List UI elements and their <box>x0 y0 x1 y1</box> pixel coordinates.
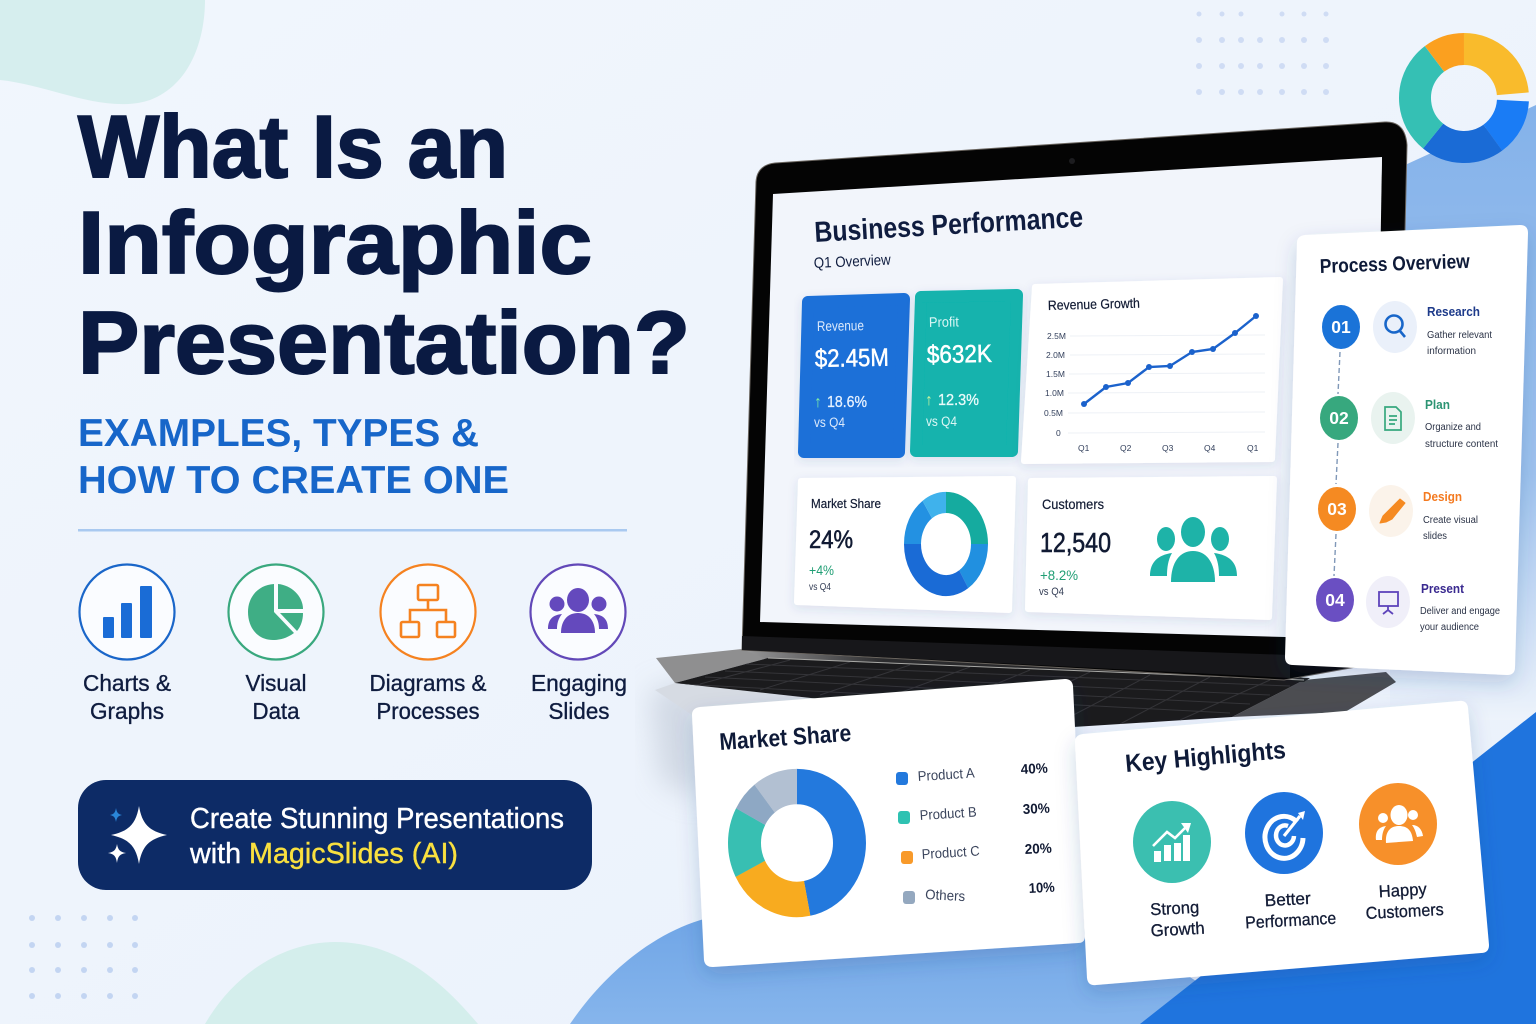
highlight: better performance: Better <box>1264 889 1312 910</box>
icon: people <box>530 564 626 660</box>
step 02 plan: structure content <box>1425 439 1498 450</box>
background shape: right light blue <box>1390 105 1536 720</box>
highlight: strong growth: Strong <box>1150 898 1200 919</box>
label: visual data <box>246 670 306 724</box>
step 04 present: Present <box>1421 581 1465 596</box>
dashboard heading: Business Performance <box>814 202 1084 249</box>
line chart: 1.5M <box>1046 369 1065 379</box>
step 04 present: your audience <box>1420 622 1479 633</box>
decorative donut chart: top right <box>1395 29 1533 167</box>
step 03 design: 03 <box>1327 499 1347 519</box>
revenue card <box>804 299 904 452</box>
icon: bar chart <box>80 564 174 660</box>
step 02 plan: 02 <box>1329 408 1349 428</box>
dashboard heading <box>813 202 1084 272</box>
laptop <box>655 122 1407 790</box>
revenue card: $2.45M <box>815 344 889 373</box>
icon: customers group <box>1150 517 1237 582</box>
title: Presentation? <box>78 293 690 392</box>
legend: 30% <box>1022 800 1051 817</box>
background blob: bottom blue <box>570 914 1260 1024</box>
customers dashboard card: +8.2% <box>1040 567 1078 583</box>
step 02 plan: Plan <box>1425 397 1450 412</box>
revenue growth card <box>1024 280 1280 461</box>
label: charts and graphs: Graphs <box>90 698 164 724</box>
icon: sparkles <box>108 806 167 864</box>
background shape: bottom-right dark blue <box>1140 712 1536 1024</box>
legend: Product B <box>919 804 977 823</box>
panel: process overview <box>1285 225 1528 675</box>
line chart: 1.0M <box>1045 388 1064 398</box>
step 01 research: 01 <box>1331 317 1351 337</box>
step 01 research: Gather relevant <box>1427 330 1492 341</box>
legend: Product A <box>917 765 976 784</box>
revenue growth card: Revenue Growth <box>1048 296 1140 313</box>
background blob: bottom teal <box>205 942 478 1024</box>
feature: charts and graphs <box>80 564 174 724</box>
line chart <box>1044 313 1265 453</box>
label: engaging slides <box>531 670 627 724</box>
profit card: Profit <box>929 313 959 330</box>
feature: diagrams and processes <box>370 564 486 724</box>
label: diagrams and processes: Diagrams & <box>370 670 486 696</box>
feature: engaging slides <box>530 564 627 724</box>
legend: 10% <box>1028 879 1056 896</box>
step 01 research: Research <box>1427 304 1480 319</box>
customers dashboard card: 12,540 <box>1040 527 1111 558</box>
button text <box>189 803 564 870</box>
line chart: Q1 <box>1247 443 1259 453</box>
revenue card: 18.6% <box>827 394 867 411</box>
profit card: ↑ <box>925 392 933 409</box>
step 01 research: information <box>1427 346 1476 357</box>
line chart: 2.0M <box>1046 350 1065 360</box>
label: engaging slides: Engaging <box>531 670 627 696</box>
market share dashboard card: vs Q4 <box>809 582 831 593</box>
step 03 design <box>1318 485 1478 542</box>
step 02 plan <box>1320 392 1498 450</box>
button text: with MagicSlides (AI) <box>189 838 458 870</box>
key highlights heading: Key Highlights <box>1124 736 1287 778</box>
step 03 design: slides <box>1423 531 1447 542</box>
market share heading: Market Share <box>719 720 852 756</box>
line chart: 2.5M <box>1047 331 1066 341</box>
panel: market share <box>692 679 1085 967</box>
icon: pie chart <box>228 564 324 660</box>
line chart: Q1 <box>1078 443 1090 453</box>
legend: Others <box>925 886 966 904</box>
step 03 design: Design <box>1423 489 1462 504</box>
panel: key highlights <box>1075 701 1489 985</box>
connector line <box>1334 352 1340 576</box>
background blob: top-left teal <box>0 0 205 104</box>
customers dashboard card <box>1028 479 1274 617</box>
subtitle: EXAMPLES, TYPES & <box>78 412 479 455</box>
label: diagrams and processes <box>370 670 486 724</box>
revenue card: vs Q4 <box>814 415 845 430</box>
laptop screen <box>760 157 1382 637</box>
label: charts and graphs <box>83 670 171 724</box>
revenue card: ↑ <box>814 394 822 411</box>
donut chart <box>899 486 993 602</box>
legend: 20% <box>1024 840 1053 857</box>
title <box>78 97 690 392</box>
label: diagrams and processes: Processes <box>376 698 480 724</box>
button text: Create Stunning Presentations <box>190 803 564 835</box>
step 02 plan: Organize and <box>1425 422 1481 433</box>
donut chart <box>723 764 871 922</box>
dot grid: bottom left <box>29 915 138 999</box>
soft shadow under laptop <box>650 680 700 800</box>
line chart: Q4 <box>1204 443 1216 453</box>
highlight: strong growth: Growth <box>1150 919 1205 940</box>
highlight: happy customers <box>1359 783 1444 923</box>
label: visual data: Data <box>252 698 300 724</box>
dashboard heading: Q1 Overview <box>813 252 891 272</box>
label: engaging slides: Slides <box>548 698 610 724</box>
subtitle: HOW TO CREATE ONE <box>78 459 509 502</box>
line chart: Q2 <box>1120 443 1132 453</box>
legend <box>896 760 1056 904</box>
profit card: $632K <box>927 340 992 369</box>
laptop keyboard deck <box>656 649 1396 727</box>
step 04 present <box>1316 576 1500 633</box>
highlight: happy customers: Happy <box>1378 880 1428 901</box>
line chart: Q3 <box>1162 443 1174 453</box>
label: visual data: Visual <box>246 670 306 696</box>
subtitle <box>78 412 509 502</box>
title: What Is an <box>78 97 508 196</box>
profit card: vs Q4 <box>926 414 957 429</box>
step 04 present: 04 <box>1325 590 1345 610</box>
highlight: better performance <box>1245 792 1337 932</box>
market share dashboard card: Market Share <box>811 496 881 511</box>
market share dashboard card: 24% <box>809 526 853 554</box>
step 04 present: Deliver and engage <box>1420 606 1500 617</box>
highlight: happy customers: Customers <box>1365 900 1444 923</box>
customers dashboard card: vs Q4 <box>1039 586 1064 598</box>
market share dashboard card: +4% <box>809 563 834 578</box>
legend: Product C <box>921 842 980 862</box>
highlight: strong growth <box>1133 801 1211 940</box>
icon: flow diagram <box>380 564 476 660</box>
legend: 40% <box>1020 760 1049 777</box>
call to action button <box>78 780 592 890</box>
step 01 research <box>1322 301 1492 357</box>
profit card: 12.3% <box>938 392 979 409</box>
line chart: 0.5M <box>1044 408 1063 418</box>
dot grid: top right <box>1196 12 1329 95</box>
label: charts and graphs: Charts & <box>83 670 171 696</box>
market share dashboard card <box>797 479 1013 610</box>
revenue card: Revenue <box>817 317 864 334</box>
laptop lid <box>742 122 1407 680</box>
highlight: better performance: Performance <box>1245 909 1337 932</box>
process heading: Process Overview <box>1319 251 1470 278</box>
feature: visual data <box>228 564 324 724</box>
step 03 design: Create visual <box>1423 515 1478 526</box>
line chart: 0 <box>1056 428 1061 438</box>
profit card <box>916 295 1017 451</box>
customers dashboard card: Customers <box>1042 496 1104 512</box>
title: Infographic <box>78 193 592 292</box>
